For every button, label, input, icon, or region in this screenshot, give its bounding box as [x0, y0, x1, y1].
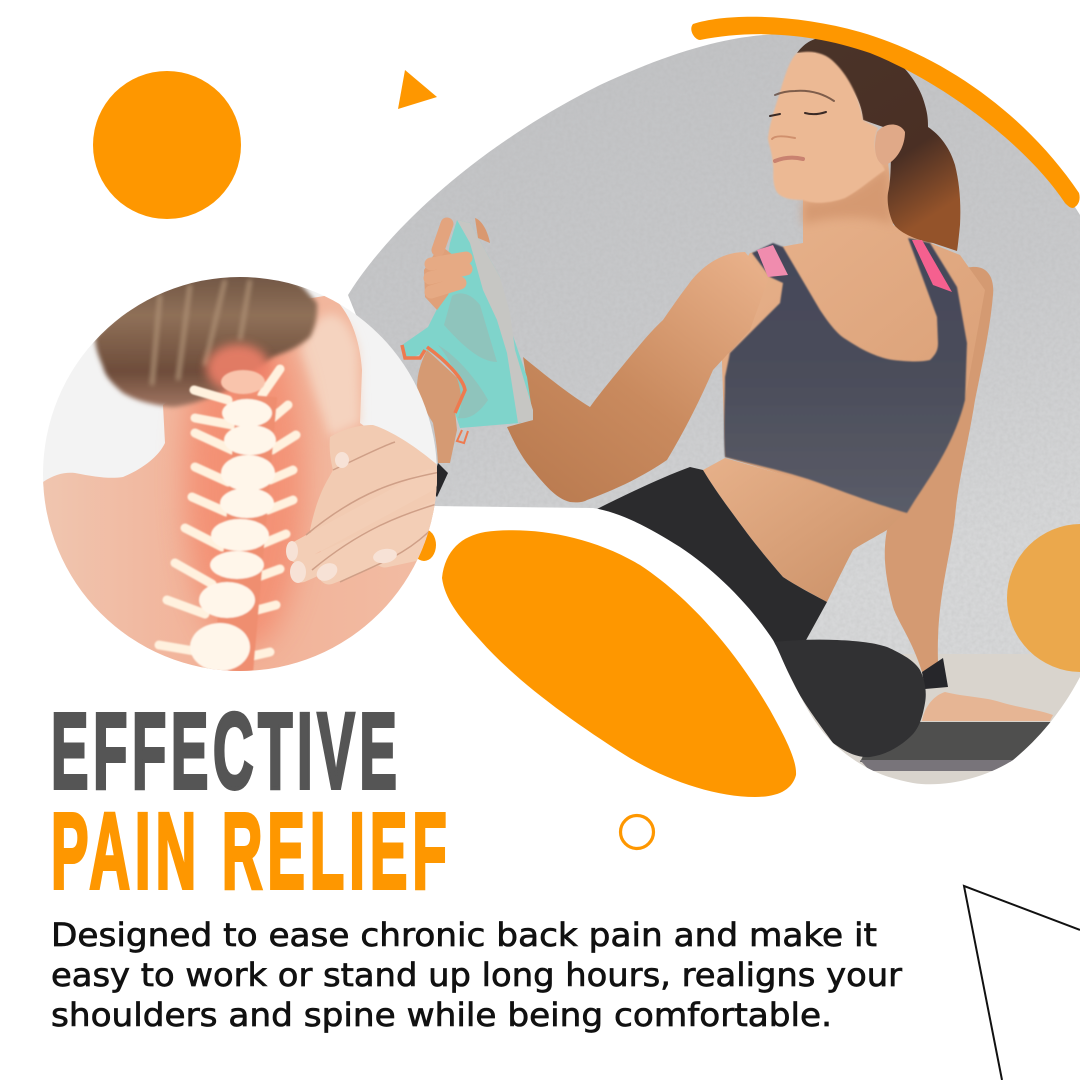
wall texture — [893, 474, 1066, 646]
decorative dot behind the neck photo — [412, 529, 436, 561]
shadow under the chin — [803, 165, 893, 225]
ear — [875, 124, 905, 165]
supporting arm — [885, 267, 993, 672]
ankle band — [436, 463, 448, 497]
raised arm — [507, 252, 768, 502]
decorative ring: orange — [620, 816, 654, 848]
hand on neck — [286, 425, 440, 584]
photo background — [43, 288, 437, 558]
back and shoulder skin — [40, 295, 440, 680]
spinal column core — [213, 394, 277, 676]
floor — [780, 654, 1080, 794]
torso skin and neck — [720, 160, 985, 513]
vertebrae — [190, 370, 276, 671]
spine — [159, 369, 296, 676]
leggings — [595, 467, 827, 645]
orange circle behind the woman — [1007, 524, 1080, 672]
body copy: shoulders and spine while being comfortable. — [51, 996, 832, 1034]
watch — [922, 658, 948, 689]
photo panel: woman stretching — [340, 20, 1080, 794]
ponytail and hair — [797, 37, 960, 251]
tank top — [724, 238, 967, 513]
red pain glow — [185, 310, 305, 650]
decorative arc: orange top — [691, 17, 1080, 208]
decorative blob: large orange — [442, 530, 796, 797]
eyes, brows and lips — [770, 91, 834, 161]
face — [768, 52, 885, 203]
pale side of neck — [300, 314, 360, 437]
body copy: easy to work or stand up long hours, realigns your — [51, 956, 903, 994]
neck photo: spine highlighted — [40, 266, 440, 680]
glow at hairline — [206, 344, 270, 392]
hand holding shoe — [424, 218, 490, 310]
decorative triangle: orange — [398, 70, 437, 109]
decorative triangle: outline — [964, 886, 1080, 1080]
wall background — [340, 20, 1080, 660]
ankle — [417, 350, 465, 463]
mat — [860, 722, 1060, 771]
heading: PAIN RELIEF: PAIN RELIEF — [51, 791, 447, 912]
supporting hand — [922, 692, 1053, 721]
decorative circle: large orange — [93, 71, 241, 219]
spinal processes — [159, 369, 296, 657]
body copy — [51, 916, 903, 1034]
shoe — [402, 220, 533, 443]
heading: EFFECTIVE: EFFECTIVE — [51, 691, 397, 812]
abdomen — [703, 458, 907, 602]
body copy: Designed to ease chronic back pain and make it — [51, 916, 877, 954]
pink straps — [757, 245, 788, 277]
knee — [773, 640, 926, 757]
hair — [95, 266, 317, 407]
